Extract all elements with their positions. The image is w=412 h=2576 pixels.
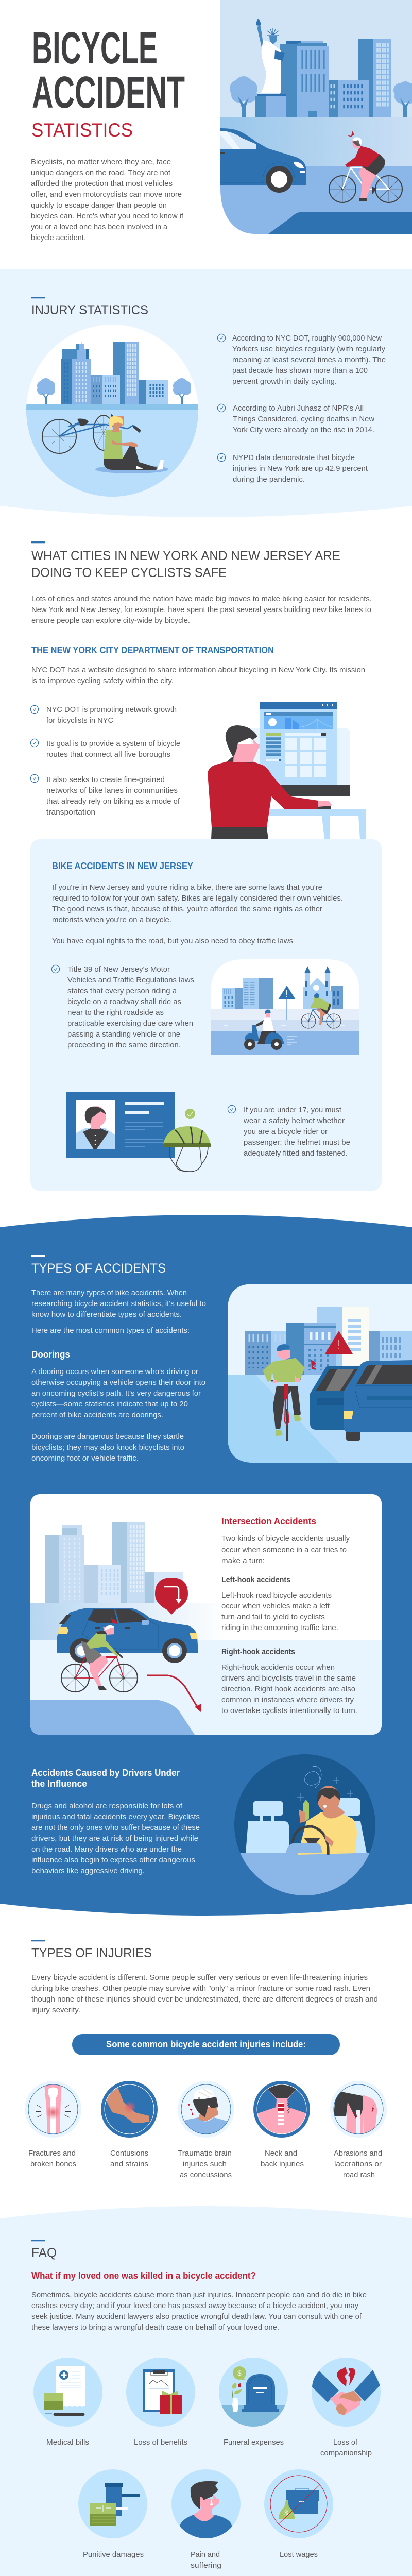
text block: under the influence: Drugs and alcohol are responsible for lots of — [31, 1802, 183, 1810]
bullet list: NYC DOT: transportation — [46, 808, 95, 817]
icon: loss of companionship — [312, 2358, 381, 2427]
panel: intersection accidents card — [30, 1494, 382, 1735]
intro text: bicycles can. Here's what you need to know if — [31, 212, 184, 221]
callout pill — [72, 2034, 340, 2055]
intro text: offer, and even motorcyclists can move more — [31, 190, 182, 199]
bullet list: statistics: NYPD data demonstrate that bicycle — [233, 453, 355, 462]
label — [261, 2149, 304, 2168]
subheading: doorings: Doorings — [31, 1349, 70, 1360]
label: Loss of — [333, 2438, 358, 2447]
bullet: Title 39: proceeding in the same direction. — [67, 1041, 181, 1049]
text block: injuries: injury severity. — [31, 2006, 80, 2014]
low building — [329, 80, 369, 117]
text block: injuries: though none of these injuries should ever be underestimated, there are different degrees of crash and — [31, 1995, 378, 2004]
panel: FAQ upper — [0, 2206, 412, 2576]
tree — [173, 378, 191, 404]
text block: under the influence: are not the only ones who suffer because of these — [31, 1823, 200, 1832]
heading: types of injuries: TYPES OF INJURIES — [31, 1946, 152, 1960]
icon: fracture — [25, 2081, 81, 2138]
text block: under the influence: injurious and fatal accidents every year. Bicyclists — [31, 1812, 200, 1821]
text block: intro — [31, 1289, 206, 1335]
answer 1: these lawyers to bring a wrongful death case on behalf of your loved one. — [31, 2323, 279, 2332]
icon: cyclist — [301, 993, 341, 1028]
label — [110, 2149, 148, 2168]
text block: doorings: bicyclists; they may also knock bicyclists into — [31, 1443, 184, 1452]
text block: intro: There are many types of bike accidents. When — [31, 1289, 187, 1297]
label — [334, 2149, 382, 2179]
illustration: dooring scene — [228, 1284, 412, 1463]
heading: TYPES OF ACCIDENTS — [31, 1261, 166, 1276]
heading: under the influence: the Influence — [31, 1778, 87, 1789]
label: Medical bills — [46, 2438, 89, 2447]
bullet list: NYC DOT: Its goal is to provide a system of bicycle — [46, 739, 180, 748]
bullet list: NYC DOT — [30, 705, 180, 817]
label: back injuries — [261, 2160, 304, 2168]
label: Contusions — [110, 2149, 148, 2158]
text block: right hook: drivers and bicyclists travel in the same — [221, 1674, 356, 1683]
tall building — [358, 39, 391, 117]
text block: cities intro: New York and New Jersey, for example, have spent the past several years building new bike lanes to — [31, 605, 371, 614]
label: Funeral expenses — [224, 2438, 284, 2447]
intro text: afforded the protection that most vehicles — [31, 179, 173, 188]
bullet list: statistics: According to Aubri Juhasz of NPR's All — [233, 404, 364, 413]
intro text: Bicyclists, no matter where they are, face — [31, 158, 171, 166]
title: BICYCLE — [32, 23, 158, 73]
text block: intersection: occur when someone in a car tries to — [221, 1546, 347, 1554]
icon: neck injury — [253, 2081, 310, 2138]
person — [208, 725, 332, 839]
text block: You have equal rights to the road, but you also need to obey traffic laws — [52, 937, 293, 945]
label: Lost wages — [280, 2550, 318, 2559]
icon: crash mark — [311, 1360, 316, 1369]
heading: FAQ — [31, 2246, 57, 2260]
text block: injuries — [31, 1973, 378, 2014]
bullet: Title 39: passing a standing vehicle or one — [67, 1030, 180, 1039]
icon: lost wages: $ — [284, 2509, 288, 2517]
illustration: injured cyclist in city — [26, 325, 198, 497]
icon: scooter — [244, 1010, 297, 1050]
text block: NYC DOT — [31, 666, 365, 685]
label — [191, 2550, 221, 2570]
seats — [246, 1798, 367, 1853]
heading: INJURY STATISTICS — [31, 303, 148, 317]
illustration: impaired driver — [234, 1754, 375, 1896]
icon: turn pin — [155, 1578, 188, 1615]
bullet list: NYC DOT: that already rely on biking as a mode of — [46, 797, 180, 806]
label — [320, 2438, 372, 2458]
text block: doorings: otherwise occupying a vehicle opens their door into — [31, 1378, 205, 1387]
text block: right hook: direction. Right hook accidents are also — [221, 1685, 355, 1693]
icon: warning triangle — [325, 1331, 353, 1354]
accent bar — [31, 1255, 45, 1257]
answer 1: Sometimes, bicycle accidents cause more than just injuries. Innocent people can and do die in bike — [31, 2291, 367, 2299]
icon: front-view cyclist — [263, 1344, 305, 1441]
bullet: Title 39: states that every person riding a — [67, 987, 177, 995]
shadow — [95, 465, 168, 473]
buildings — [245, 1307, 412, 1375]
answer 1: seek justice. Many accident lawyers also practice wrongful death law. You can consult with one of — [31, 2312, 362, 2321]
heading: cities: WHAT CITIES IN NEW YORK AND NEW JERSEY ARE — [31, 549, 340, 563]
icon: crash mark — [111, 1618, 118, 1624]
label: as concussions — [180, 2171, 232, 2179]
bullet: Title 39: near to the right roadside as — [67, 1008, 164, 1017]
label: Neck and — [265, 2149, 297, 2158]
illustration: person at computer — [208, 702, 366, 839]
intro text: unique dangers on the road. They are not — [31, 168, 171, 177]
text block: left hook: occur when vehicles make a left — [221, 1602, 330, 1611]
accent bar — [31, 541, 45, 543]
icon: cyclist — [329, 131, 402, 202]
illustration: hero city street with car and cyclist — [220, 0, 412, 234]
heading: cities — [31, 549, 340, 580]
building — [139, 380, 168, 404]
icon: helmet — [163, 1109, 211, 1172]
text block: cities intro: Lots of cities and states around the nation have made big moves to make biking easier for residents. — [31, 595, 372, 603]
text block: doorings: oncoming foot or vehicle traffic. — [31, 1454, 139, 1463]
text block: under the influence: on the road. Many drivers who are under the — [31, 1845, 182, 1854]
label: Abrasions and — [334, 2149, 382, 2158]
icon: loss of benefits — [126, 2358, 195, 2427]
intro text: you or a loved one has been involved in a — [31, 223, 168, 231]
text block: under the influence: drivers, but they are at risk of being injured while — [31, 1834, 198, 1843]
text block: injuries: during bike crashes. Other people may survive with "only" a minor fracture or some road rash. Even — [31, 1984, 370, 1993]
label: and strains — [110, 2160, 148, 2168]
text block: intro: know how to differentiate types of accidents. — [31, 1310, 182, 1319]
accent bar — [31, 2240, 45, 2241]
buildings — [222, 978, 273, 1009]
label — [178, 2149, 232, 2179]
label: companionship — [320, 2449, 372, 2458]
icon: open car door — [310, 1366, 360, 1430]
icon: statue of liberty — [255, 19, 286, 117]
icon: warning sign — [278, 986, 296, 1020]
bullet: Title 39: bicycle on a roadway shall ride as — [67, 997, 181, 1006]
driver — [286, 1786, 357, 1855]
text block — [52, 883, 343, 945]
heading: right hook: Right-hook accidents — [221, 1648, 295, 1656]
bullet: helmet law: you are a bicycle rider or — [244, 1127, 328, 1136]
bullet list: NYC DOT: for bicyclists in NYC — [46, 716, 113, 725]
bullet list: statistics: meaning at least several times a month). The — [232, 355, 386, 364]
bullet: Title 39: practicable exercising due care when — [67, 1019, 193, 1028]
text block: left hook: riding in the oncoming traffic lane. — [221, 1623, 338, 1632]
subheading: BIKE ACCIDENTS IN NEW JERSEY — [52, 861, 193, 871]
icon: ID card — [66, 1092, 175, 1158]
label: Traumatic brain — [178, 2149, 232, 2158]
text block: left hook: turn and fail to yield to cyclists — [221, 1613, 325, 1621]
text block: The good news is that, because of this, you're afforded the same rights as other — [52, 905, 322, 913]
label: broken bones — [30, 2160, 76, 2168]
building — [91, 375, 120, 404]
bullet: Title 39: Vehicles and Traffic Regulations laws — [67, 976, 194, 985]
bullet list: statistics — [217, 334, 386, 484]
bullet: helmet law: If you are under 17, you must — [244, 1106, 342, 1114]
accent bar — [31, 1940, 45, 1941]
text block: doorings: cyclists—some statistics indicate that up to 20 — [31, 1400, 188, 1409]
bullet list: NYC DOT: NYC DOT is promoting network growth — [46, 705, 177, 714]
bullet list: statistics: According to NYC DOT, roughly 900,000 New — [232, 334, 382, 343]
bullet list: statistics: Yorkers use bicycles regularly (with regularly — [232, 345, 385, 353]
label: Pain and — [191, 2550, 220, 2559]
text block: left hook: Left-hook road bicycle accidents — [221, 1591, 332, 1600]
bullet list: statistics: Things Considered, cycling deaths in New — [233, 415, 374, 423]
text block: motorists when you're on a bicycle. — [52, 916, 171, 924]
answer 1 — [31, 2291, 367, 2332]
label: Fractures and — [28, 2149, 76, 2158]
icon: fallen bicycle — [42, 414, 141, 453]
text block: doorings: percent of bike accidents are doorings. — [31, 1411, 163, 1419]
building — [61, 342, 91, 404]
intro text: bicycle accident. — [31, 233, 86, 242]
text block: doorings — [31, 1367, 205, 1463]
desk — [268, 785, 366, 839]
icon: brain injury — [178, 2081, 234, 2138]
text block: intersection — [221, 1534, 350, 1565]
building — [113, 342, 139, 404]
label: suffering — [191, 2561, 221, 2570]
panel: bike accidents in New Jersey — [30, 839, 382, 1191]
text block: injuries: Every bicycle accident is different. Some people suffer very serious or even life-threatening injuries — [31, 1973, 368, 1982]
title — [32, 23, 185, 117]
bullet: helmet law: wear a safety helmet whether — [243, 1116, 345, 1125]
heading: intersection accidents: Intersection Accidents — [221, 1516, 316, 1527]
heading: under the influence: Accidents Caused by Drivers Under — [31, 1768, 180, 1778]
answer 1: crashes every day; and if your loved one has passed away because of a bicycle accident, you may — [31, 2301, 358, 2310]
icon: tree right — [393, 81, 412, 117]
text block: left hook — [221, 1591, 338, 1632]
text block: If you're in New Jersey and you're riding a bike, there are some laws that you're — [52, 883, 322, 892]
bullet list: statistics: York City were already on the rise in 2014. — [233, 426, 374, 434]
subheading: NYC DOT: THE NEW YORK CITY DEPARTMENT OF TRANSPORTATION — [31, 645, 274, 655]
tree — [37, 378, 55, 404]
icon: funeral expenses — [219, 2358, 288, 2427]
bullet list: NYC DOT: networks of bike lanes in communities — [46, 786, 178, 795]
callout pill: Some common bicycle accident injuries include: — [106, 2039, 306, 2049]
faded buildings — [45, 1522, 183, 1603]
label: road rash — [343, 2171, 375, 2179]
heading: left hook: Left-hook accidents — [221, 1575, 290, 1584]
accent bar — [31, 297, 45, 298]
bullet list: NYC DOT: It also seeks to create fine-grained — [46, 775, 165, 784]
bullet: helmet law — [228, 1105, 350, 1158]
text block: intersection: make a turn: — [221, 1556, 265, 1565]
text block: under the influence: influence also begin to express other dangerous — [31, 1856, 195, 1865]
divider — [49, 1076, 362, 1077]
bullet list: statistics: percent growth in daily cycling. — [232, 377, 337, 386]
arrow: right hook path — [147, 1675, 201, 1712]
bullet list: statistics: past decade has shown more than a 100 — [232, 366, 368, 375]
bullet list: NYC DOT: routes that connect all five boroughs — [46, 750, 170, 759]
label: Punitive damages — [83, 2550, 144, 2559]
question 1: What if my loved one was killed in a bicycle accident? — [31, 2270, 256, 2281]
browser window — [260, 702, 337, 785]
label: injuries such — [183, 2160, 227, 2168]
text block: cities intro — [31, 595, 372, 625]
bullet: Title 39 — [52, 965, 194, 1049]
label: Loss of benefits — [134, 2438, 187, 2447]
icon: cyclist — [61, 1625, 138, 1692]
text block: intro: Here are the most common types of accidents: — [31, 1326, 190, 1335]
label — [28, 2149, 76, 2168]
text block: doorings: an oncoming cyclist's path. It's very dangerous for — [31, 1389, 201, 1398]
icon: medical bills — [33, 2358, 102, 2427]
intro text: quickly to escape danger than people on — [31, 201, 167, 210]
text block: right hook: to overtake cyclists intentionally to turn. — [221, 1706, 357, 1715]
heading: cities: DOING TO KEEP CYCLISTS SAFE — [31, 566, 227, 580]
heading: under the influence — [31, 1768, 180, 1789]
text block: under the influence — [31, 1802, 200, 1875]
bullet list: statistics: injuries in New York are up 42.9 percent — [233, 464, 368, 473]
building behind statue — [280, 41, 329, 117]
text block: intersection: Two kinds of bicycle accidents usually — [221, 1534, 350, 1543]
icon: car — [220, 128, 306, 193]
icon: blue car — [57, 1608, 198, 1663]
icon: funeral expenses: $ — [237, 2369, 242, 2377]
intro text — [31, 158, 184, 242]
bullet: helmet law: passenger; the helmet must be — [244, 1138, 350, 1147]
icon: lost wages — [264, 2469, 333, 2538]
text block: NYC DOT: NYC DOT has a website designed to share information about bicycling in New York City. Its mission — [31, 666, 365, 674]
text block: NYC DOT: is to improve cycling safety within the city. — [31, 676, 174, 685]
text block: doorings: Doorings are dangerous because they startle — [31, 1432, 184, 1441]
bullet: helmet law: adequately fitted and fastened. — [244, 1149, 348, 1158]
icon: sitting person — [104, 416, 164, 470]
text block: under the influence: behaviors like aggressive driving. — [31, 1867, 145, 1875]
text block: right hook: common in instances where drivers try — [221, 1696, 354, 1704]
icon: parked car — [344, 1360, 412, 1441]
icon: abrasions — [330, 2081, 387, 2138]
title: ACCIDENT — [32, 67, 185, 117]
text block: doorings: A dooring occurs when someone who's driving or — [31, 1367, 198, 1376]
label: lacerations or — [334, 2160, 382, 2168]
subtitle: STATISTICS — [31, 120, 133, 141]
illustration: road with scooter and cyclist — [211, 959, 359, 1055]
icon: church — [303, 966, 343, 1009]
text block: required to follow for your own safety. Bikes are legally considered their own vehicles. — [52, 894, 343, 903]
text block: intro: researching bicycle accident statistics, it's useful to — [31, 1299, 206, 1308]
icon: contusion — [101, 2081, 158, 2138]
bullet: Title 39: Title 39 of New Jersey's Motor — [67, 965, 170, 974]
icon: punitive damages — [78, 2469, 147, 2538]
text block: right hook: Right-hook accidents occur when — [221, 1663, 335, 1672]
bullet list: statistics: during the pandemic. — [233, 475, 305, 484]
icon: pain and suffering — [171, 2469, 241, 2540]
text block: cities intro: ensure people can explore city-wide by bicycle. — [31, 616, 190, 625]
panel: injury statistics — [0, 269, 412, 517]
text block: right hook — [221, 1663, 357, 1715]
icon: tree left — [230, 76, 258, 117]
panel: types of accidents — [0, 1215, 412, 1916]
